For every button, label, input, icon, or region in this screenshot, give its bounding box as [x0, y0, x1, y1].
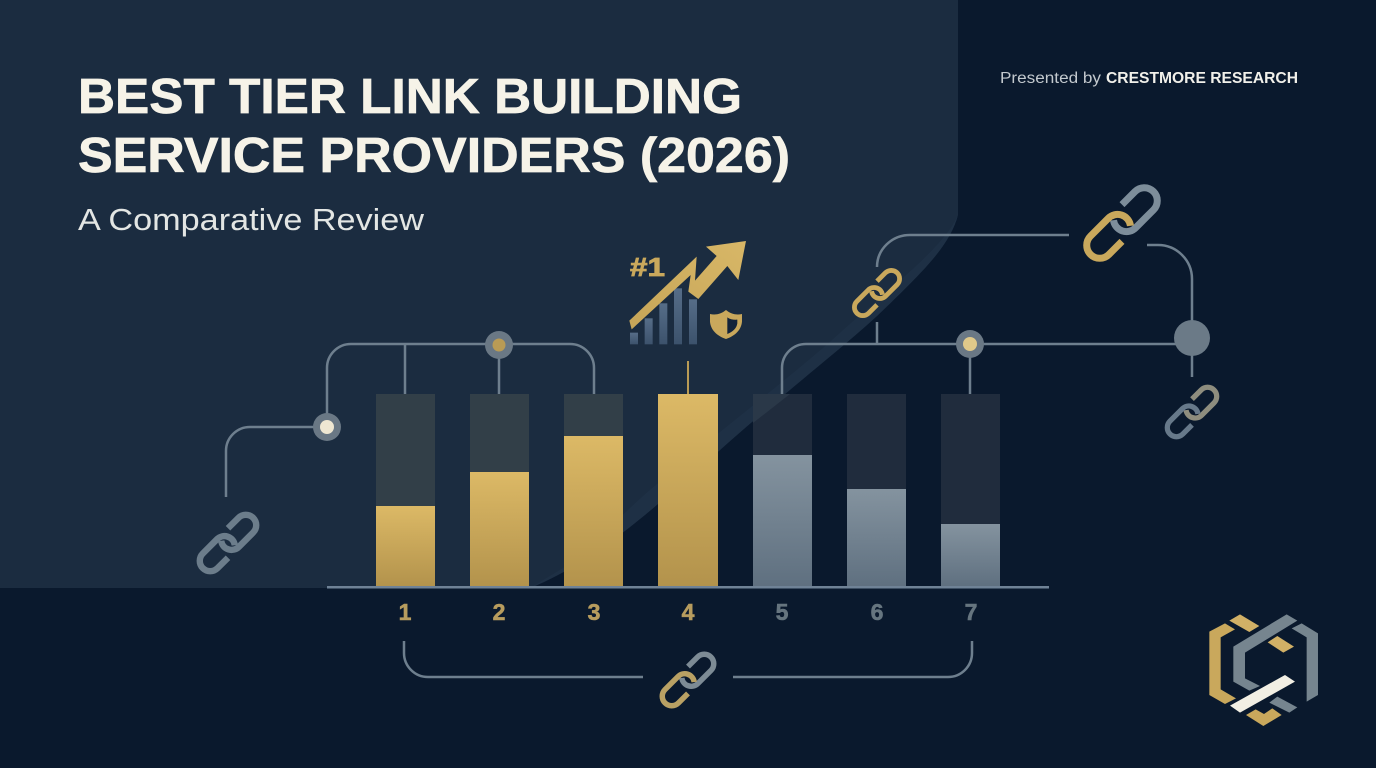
bar 5 — [753, 394, 812, 586]
axis labels: 1 — [399, 599, 412, 625]
icon: number one ranking with arrow and shield — [629, 241, 746, 344]
connector network — [226, 235, 1192, 677]
axis labels: 5 — [776, 599, 789, 625]
bar chart — [327, 361, 1049, 625]
icon: chain link large top — [1081, 182, 1163, 264]
icon: chain link small gold — [851, 267, 903, 319]
node: top junction — [485, 331, 513, 359]
bar 6 — [847, 394, 906, 586]
icon: chain link lower right — [1164, 384, 1220, 440]
presenter credit — [1000, 70, 1298, 87]
presenter credit: CRESTMORE RESEARCH — [1106, 70, 1298, 87]
subtitle: A Comparative Review — [78, 202, 425, 237]
icon: chain link left — [195, 510, 261, 576]
presenter credit: Presented by — [1000, 70, 1101, 87]
bar 1 — [376, 394, 435, 586]
icon: chain link bottom — [658, 650, 718, 710]
icon: shield — [710, 310, 742, 339]
axis labels: 7 — [965, 599, 977, 625]
bar 3 — [564, 394, 623, 586]
axis — [327, 586, 1049, 588]
icon: rising arrow — [629, 241, 746, 329]
icon: mini bars — [630, 288, 697, 344]
node: large hub — [1174, 320, 1210, 356]
bar 2 — [470, 394, 529, 586]
axis labels: 3 — [588, 599, 600, 625]
axis labels — [399, 599, 977, 625]
axis labels: 2 — [493, 599, 505, 625]
node: right junction — [956, 330, 984, 358]
rank label: #1 — [630, 252, 665, 282]
panel: header backdrop — [0, 0, 958, 588]
bar 7 — [941, 394, 1000, 586]
title: SERVICE PROVIDERS (2026) — [78, 129, 790, 183]
logo — [1209, 614, 1318, 726]
node: left junction — [313, 413, 341, 441]
axis labels: 4 — [682, 599, 695, 625]
bar 4 — [658, 361, 718, 586]
title — [78, 70, 790, 183]
title: BEST TIER LINK BUILDING — [78, 70, 742, 124]
axis labels: 6 — [871, 599, 883, 625]
